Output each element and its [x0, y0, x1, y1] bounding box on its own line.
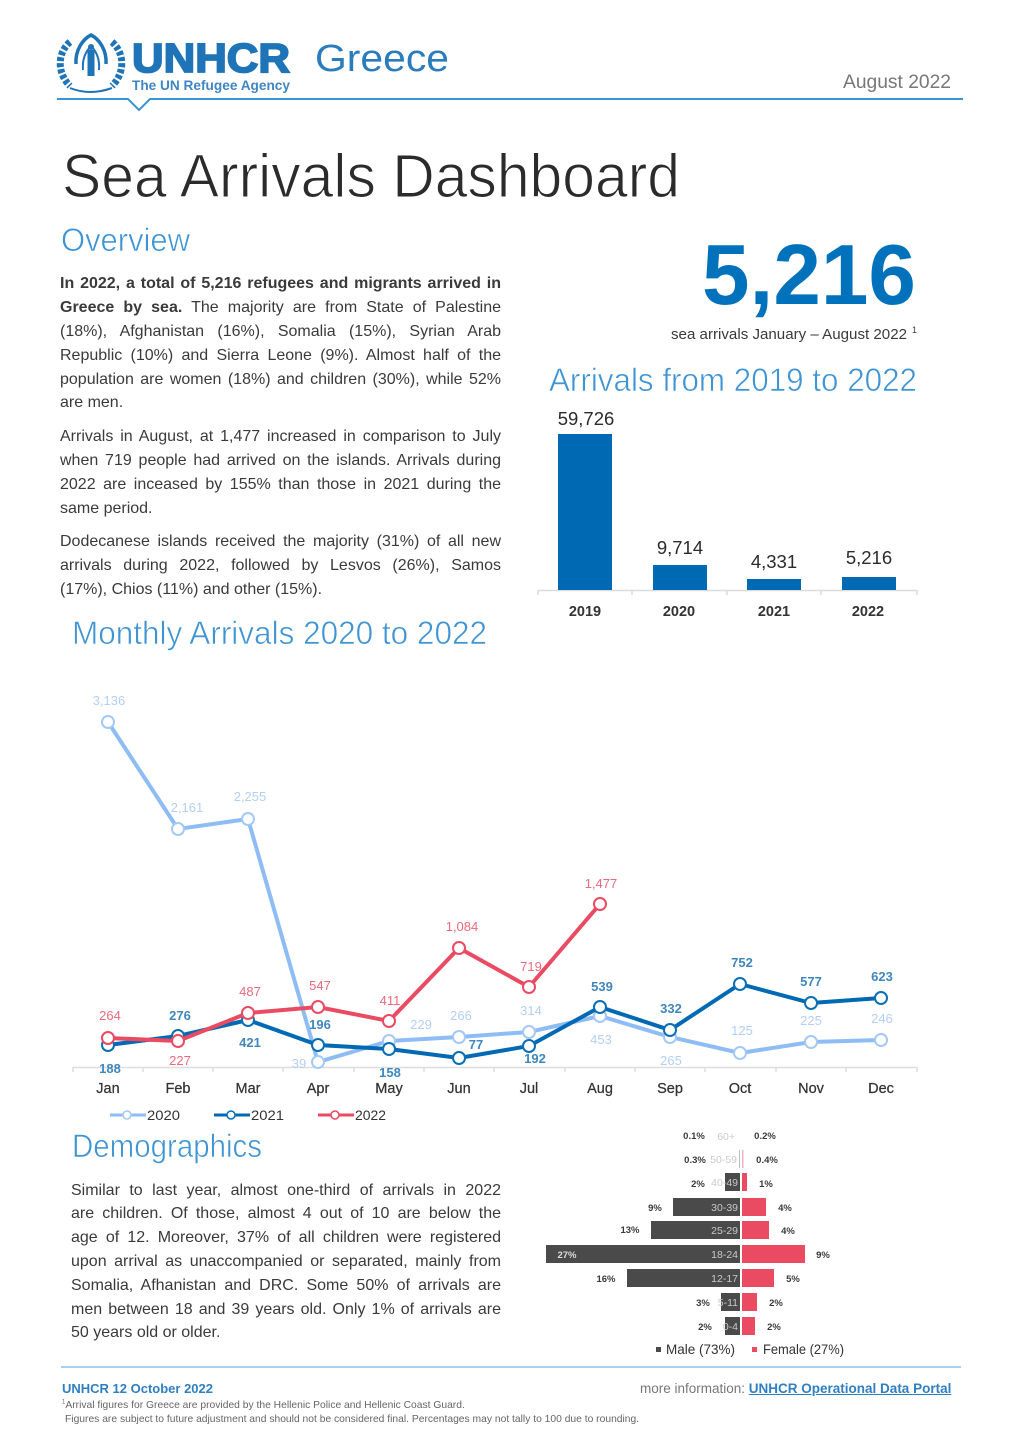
series 2022	[99, 876, 617, 1068]
chart legend: 2021	[251, 1107, 284, 1123]
icon: UNHCR logo emblem	[60, 35, 122, 92]
series 2021: 577	[800, 974, 822, 989]
text block: overview: are men.	[60, 394, 123, 411]
series 2021: 421	[239, 1035, 261, 1050]
line chart: monthly arrivals	[73, 693, 917, 1123]
series 2020: 39	[292, 1056, 306, 1071]
pyramid legend	[656, 1341, 844, 1357]
bar 2020	[653, 537, 707, 620]
male percent labels: 3%	[696, 1298, 710, 1309]
text block: demographics: Somalia, Afhanistan and DRC. Some 50% of arrivals are	[71, 1277, 501, 1294]
age labels	[710, 1131, 738, 1333]
logo tagline: The UN Refugee Agency	[132, 77, 290, 93]
age labels: 50-59	[710, 1154, 737, 1166]
bar 2022: 2022	[852, 604, 884, 620]
series 2021: 623	[871, 969, 893, 984]
female percent labels: 4%	[781, 1226, 795, 1237]
series 2021: 77	[469, 1037, 483, 1052]
bar 2020: 2020	[663, 604, 695, 620]
text block: demographics: are children. Of those, almost 4 out of 10 are below the	[71, 1205, 501, 1222]
month axis labels: Mar	[236, 1081, 261, 1097]
month axis labels: Apr	[307, 1081, 329, 1097]
month axis labels: Jun	[447, 1081, 471, 1097]
age labels: 60+	[717, 1131, 735, 1143]
age labels: 5-11	[718, 1297, 738, 1309]
bar 2021	[747, 551, 801, 620]
male percent labels	[557, 1131, 712, 1333]
series 2020: 453	[590, 1032, 612, 1047]
heading: demographics: Demographics	[72, 1128, 262, 1164]
text block: overview: 2022 are inceased by 155% than those in 2021 during the	[60, 476, 501, 493]
series 2021: 158	[379, 1065, 401, 1080]
footnotes: 1Arrival figures for Greece are provided by the Hellenic Police and Hellenic Coast Guard.	[62, 1400, 465, 1411]
series 2022: 264	[99, 1008, 121, 1023]
country name: Greece	[315, 38, 449, 80]
male percent labels: 2%	[698, 1322, 712, 1333]
series 2021: 192	[524, 1051, 546, 1066]
bar 2019: 59,726	[558, 408, 614, 429]
big number: 5,216	[702, 228, 916, 323]
bar 2019	[558, 408, 614, 620]
male percent labels: 16%	[596, 1274, 616, 1285]
series 2021: 752	[731, 955, 753, 970]
age labels: 12-17	[711, 1273, 738, 1285]
female percent labels: 4%	[778, 1203, 792, 1214]
text block: demographics	[71, 1182, 501, 1341]
bar 2021: 2021	[758, 604, 790, 620]
month axis labels: Jan	[96, 1081, 120, 1097]
chart legend	[110, 1107, 386, 1123]
series 2020: 229	[410, 1017, 432, 1032]
heading: overview: Overview	[61, 222, 191, 258]
series 2022: 547	[309, 978, 331, 993]
text block: demographics: Similar to last year, almost one-third of arrivals in 2022	[71, 1182, 501, 1199]
text block: demographics: upon arrival as unaccompanied or separated, mainly from	[71, 1253, 501, 1270]
text block: overview: arrivals during 2022, followed by Lesvos (26%), Samos	[60, 557, 501, 574]
pyramid legend: Female (27%)	[763, 1341, 844, 1357]
series 2020: 314	[520, 1003, 542, 1018]
month axis labels: Nov	[798, 1081, 825, 1097]
male percent labels: 13%	[620, 1225, 640, 1236]
series 2020: 3,136	[93, 693, 125, 708]
series 2021: 188	[99, 1061, 121, 1076]
bar 2022	[842, 547, 896, 620]
male bars	[546, 1150, 740, 1335]
chart legend: 2022	[355, 1107, 386, 1123]
series 2021: 276	[169, 1008, 191, 1023]
male percent labels: 0.3%	[684, 1155, 706, 1166]
bar 2019: 2019	[569, 604, 601, 620]
female percent labels: 9%	[816, 1250, 830, 1261]
female bars	[742, 1150, 805, 1335]
month axis labels: May	[375, 1081, 403, 1097]
female percent labels: 0.2%	[754, 1131, 776, 1142]
header	[57, 35, 963, 110]
series 2021: 332	[660, 1001, 682, 1016]
female percent labels: 2%	[767, 1322, 781, 1333]
month axis labels	[96, 1081, 894, 1097]
female percent labels	[754, 1131, 830, 1333]
month axis labels: Sep	[657, 1081, 683, 1097]
footer link: more information: UNHCR Operational Data Portal	[640, 1381, 951, 1396]
male percent labels: 2%	[691, 1179, 705, 1190]
footer rule	[61, 1366, 961, 1368]
male percent labels: 9%	[648, 1203, 662, 1214]
heading: monthly arrivals: Monthly Arrivals 2020 to 2022	[72, 615, 487, 651]
series 2021	[99, 955, 893, 1080]
series 2022: 1,477	[585, 876, 617, 891]
series 2020: 125	[731, 1023, 753, 1038]
series 2022: 227	[169, 1053, 191, 1068]
heading: arrivals from 2019 to 2022: Arrivals from 2019 to 2022	[549, 362, 917, 398]
footnote mark: 1	[912, 325, 917, 335]
footnotes	[62, 1399, 639, 1425]
month axis labels: Dec	[868, 1081, 894, 1097]
text block: overview: population are women (18%) and children (30%), while 52%	[60, 371, 501, 388]
text block: overview	[60, 275, 502, 598]
text block: overview: In 2022, a total of 5,216 refugees and migrants arrived in	[60, 275, 501, 292]
text block: overview: when 719 people had arrived on the islands. Arrivals during	[60, 452, 501, 469]
age labels: 40-49	[711, 1177, 738, 1189]
series 2020: 2,161	[171, 800, 203, 815]
text block: demographics: age of 12. Moreover, 37% of all children were registered	[71, 1229, 501, 1246]
date: August 2022	[843, 72, 951, 93]
text block: overview: (18%), Afghanistan (16%), Somalia (15%), Syrian Arab	[60, 323, 501, 340]
male percent labels: 27%	[557, 1250, 577, 1261]
male percent labels: 0.1%	[683, 1131, 705, 1142]
text block: overview: (17%), Chios (11%) and other (15%).	[60, 581, 322, 598]
age labels: 0-4	[723, 1321, 738, 1333]
series 2020: 2,255	[234, 789, 266, 804]
female percent labels: 0.4%	[756, 1155, 778, 1166]
series 2021: 196	[309, 1017, 331, 1032]
series 2022: 719	[520, 959, 542, 974]
population pyramid	[546, 1131, 844, 1357]
series 2020: 266	[450, 1008, 472, 1023]
big number caption: sea arrivals January – August 2022	[671, 327, 907, 343]
title: Sea Arrivals Dashboard	[62, 142, 680, 210]
month axis labels: Jul	[520, 1081, 538, 1097]
text block: overview: Greece by sea. The majority are from State of Palestine	[60, 299, 501, 316]
bar chart: yearly arrivals	[538, 408, 917, 620]
series 2020: 225	[800, 1013, 822, 1028]
text block: overview: Arrivals in August, at 1,477 increased in comparison to July	[60, 428, 501, 445]
age labels: 18-24	[711, 1249, 738, 1261]
bar 2021: 4,331	[751, 551, 797, 572]
header rule with chevron	[57, 99, 963, 110]
month axis labels: Aug	[587, 1081, 613, 1097]
footnotes: Figures are subject to future adjustment and should not be considered final. Percentages may not tally to 100 due to rounding.	[65, 1414, 639, 1425]
age labels: 30-39	[711, 1202, 738, 1214]
female percent labels: 2%	[769, 1298, 783, 1309]
logo wordmark: UNHCR	[132, 35, 290, 81]
series 2020: 246	[871, 1011, 893, 1026]
bar 2022: 5,216	[846, 547, 892, 568]
month axis labels: Oct	[729, 1081, 751, 1097]
series 2020: 265	[660, 1053, 682, 1068]
series 2022: 1,084	[446, 919, 478, 934]
chart legend: 2020	[147, 1107, 180, 1123]
text block: demographics: 50 years old or older.	[71, 1324, 220, 1341]
text block: overview: Republic (10%) and Sierra Leone (9%). Almost half of the	[60, 347, 501, 364]
female percent labels: 5%	[786, 1274, 800, 1285]
text block: overview: Dodecanese islands received the majority (31%) of all new	[60, 533, 501, 550]
text block: demographics: men between 18 and 39 years old. Only 1% of arrivals are	[71, 1301, 501, 1318]
bar 2020: 9,714	[657, 537, 703, 558]
series 2022: 487	[239, 984, 261, 999]
series 2022: 411	[380, 993, 400, 1008]
series 2021: 539	[591, 979, 613, 994]
footer source: UNHCR 12 October 2022	[62, 1381, 213, 1396]
pyramid legend: Male (73%)	[666, 1341, 735, 1357]
month axis labels: Feb	[166, 1081, 190, 1097]
age labels: 25-29	[711, 1225, 738, 1237]
text block: overview: same period.	[60, 500, 152, 517]
series 2020	[93, 693, 893, 1071]
female percent labels: 1%	[759, 1179, 773, 1190]
